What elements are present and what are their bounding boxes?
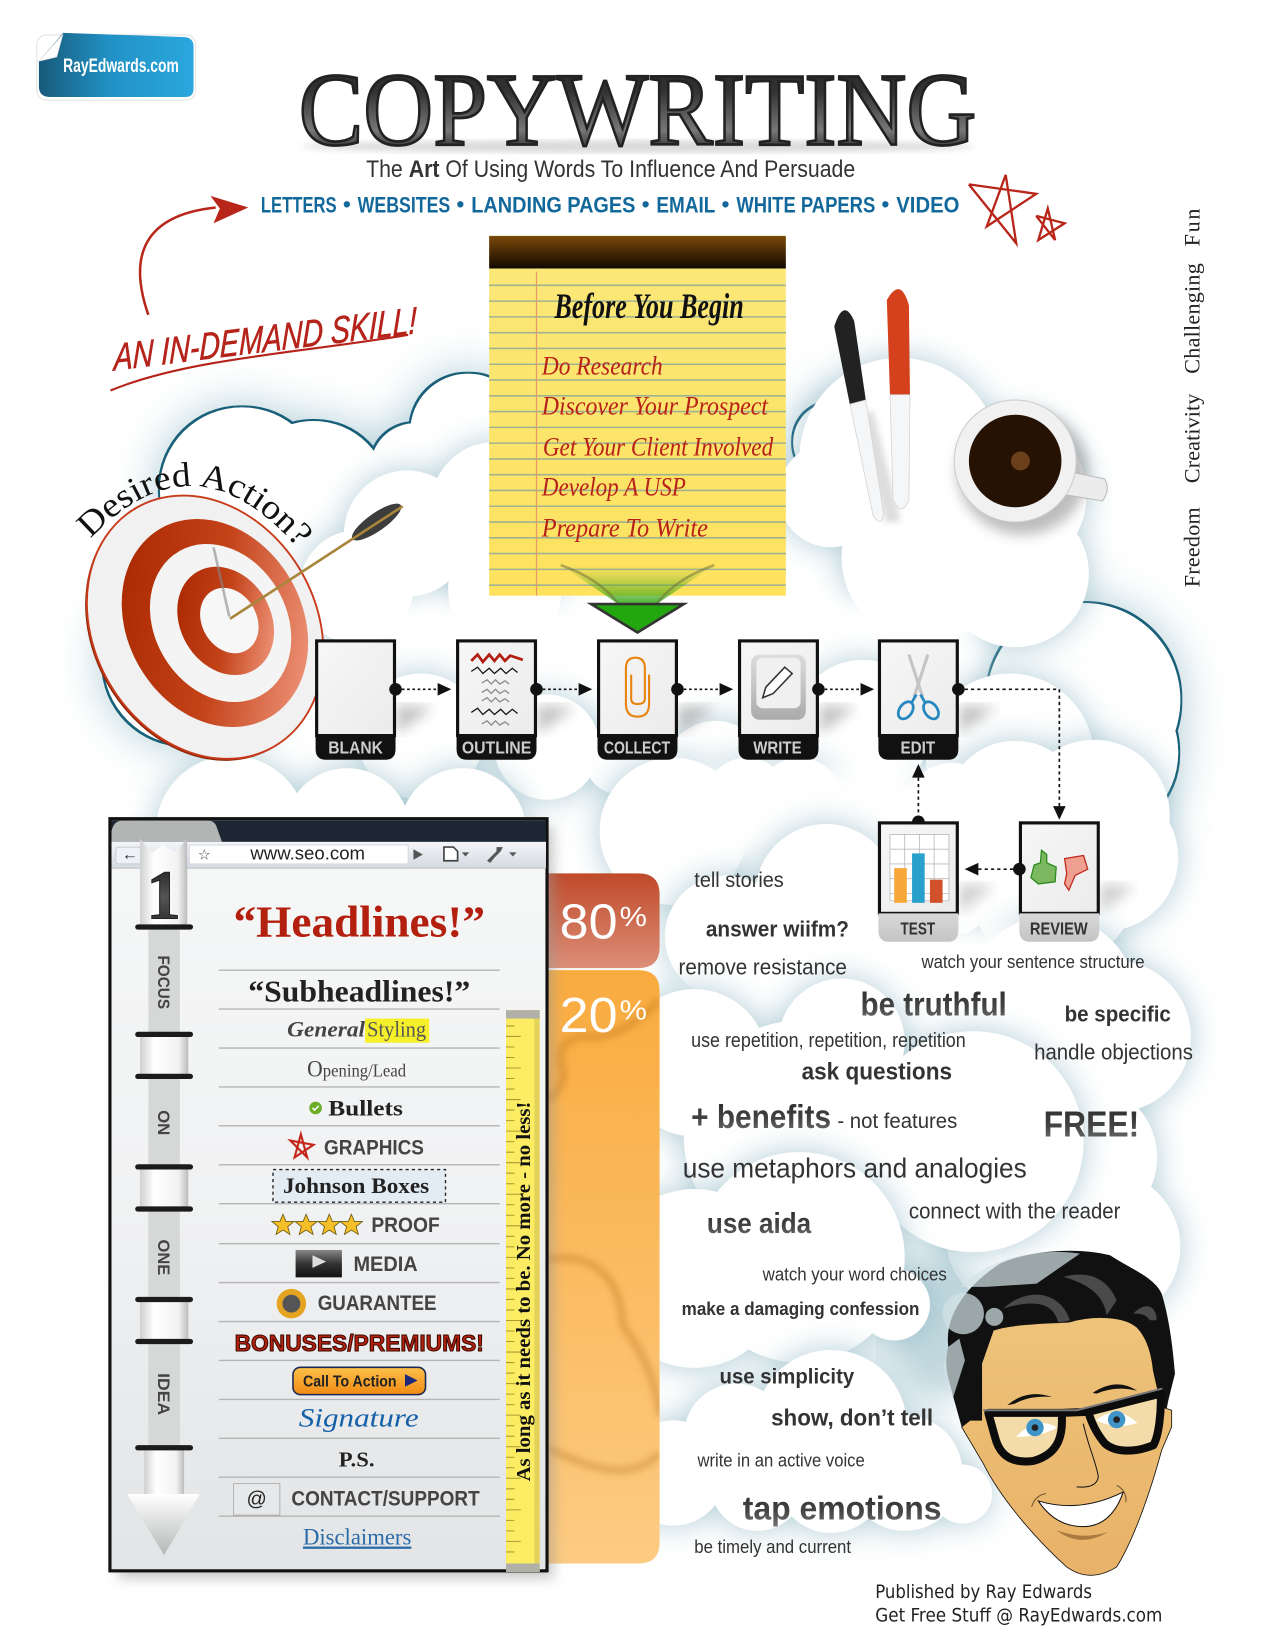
media: MEDIA bbox=[353, 1253, 418, 1276]
word cloud: use metaphors and analogies bbox=[683, 1152, 1027, 1183]
bar: 20 percent bbox=[546, 970, 660, 1563]
handwritten callout: AN IN-DEMAND SKILL! bbox=[112, 300, 417, 380]
publisher note: Get Free Stuff @ RayEdwards.com bbox=[875, 1605, 1162, 1626]
glasses highlight bbox=[983, 1389, 1162, 1410]
browser toolbar: www.seo.com bbox=[249, 843, 365, 864]
word cloud: tap emotions bbox=[743, 1490, 942, 1527]
word cloud: watch your sentence structure bbox=[921, 951, 1145, 972]
connector: edit to review bbox=[952, 683, 1066, 820]
mouth bbox=[1032, 1485, 1126, 1540]
opening lead: Opening/Lead bbox=[307, 1056, 406, 1082]
formats line: LETTERS bbox=[261, 193, 337, 218]
cloud: aida puffs bbox=[605, 1152, 930, 1368]
icon: red curved arrow bbox=[140, 196, 248, 315]
word cloud bbox=[679, 869, 1193, 1557]
step: review: REVIEW bbox=[1030, 918, 1088, 938]
step: test bbox=[878, 823, 994, 942]
proof bbox=[272, 1214, 440, 1237]
focus ribbon: ONE bbox=[154, 1239, 173, 1275]
notepad list: Develop A USP bbox=[541, 473, 686, 502]
word cloud: - not features bbox=[837, 1110, 957, 1133]
vertical words: Freedom bbox=[1179, 507, 1204, 587]
browser toolbar bbox=[112, 842, 546, 868]
eyebrows bbox=[1007, 1384, 1137, 1405]
guarantee bbox=[277, 1289, 437, 1318]
arrow in target bbox=[214, 498, 406, 619]
browser toolbar: ← bbox=[122, 847, 138, 864]
formats line bbox=[261, 192, 959, 218]
step: write bbox=[738, 641, 874, 760]
notepad list: Do Research bbox=[541, 352, 663, 381]
green funnel arrow bbox=[561, 565, 714, 632]
formats line: WHITE PAPERS bbox=[736, 193, 875, 218]
subheadline: “Subheadlines!” bbox=[248, 975, 470, 1009]
general styling bbox=[287, 1016, 429, 1043]
bonuses: BONUSES/PREMIUMS! bbox=[235, 1330, 484, 1356]
focus ribbon: FOCUS bbox=[154, 955, 173, 1009]
contact support bbox=[234, 1484, 480, 1515]
general styling: General bbox=[287, 1016, 366, 1041]
notepad list bbox=[541, 352, 774, 543]
thought cloud over hair bbox=[943, 1252, 1080, 1397]
step: edit: EDIT bbox=[900, 737, 935, 757]
step: review bbox=[1019, 823, 1135, 942]
formats line: LANDING PAGES bbox=[471, 193, 635, 218]
icon: coffee cup bbox=[954, 400, 1107, 535]
ruler bbox=[506, 1010, 540, 1572]
word cloud: be timely and current bbox=[694, 1536, 851, 1557]
step: collect bbox=[598, 641, 733, 760]
contact support: CONTACT/SUPPORT bbox=[291, 1488, 480, 1511]
focus ribbon: ON bbox=[154, 1110, 173, 1135]
cloud: interior fill middle bbox=[684, 926, 1052, 1042]
word cloud: connect with the reader bbox=[909, 1198, 1120, 1223]
cloud: teal outlined back clouds bbox=[103, 374, 1180, 837]
handwritten callout bbox=[110, 300, 417, 391]
cloud: interior fill lower bbox=[652, 768, 968, 863]
formats line: • bbox=[457, 192, 465, 217]
word cloud: write in an active voice bbox=[697, 1450, 865, 1471]
icon: hand drawn stars bbox=[969, 175, 1065, 243]
cloud: right side puffs bbox=[894, 915, 1191, 1323]
johnson boxes: Johnson Boxes bbox=[283, 1173, 430, 1198]
step: edit bbox=[878, 641, 996, 760]
call to action button: Call To Action bbox=[303, 1374, 397, 1391]
eyes bbox=[1016, 1411, 1137, 1437]
cloud: interior fill bbox=[368, 600, 978, 695]
process flow bbox=[316, 641, 1135, 942]
notepad list: Get Your Client Involved bbox=[543, 433, 774, 462]
cloud: top puffs bbox=[300, 358, 1089, 647]
guarantee: GUARANTEE bbox=[318, 1292, 437, 1315]
ruler text: As long as it needs to be. No more - no less! bbox=[513, 1102, 535, 1481]
call to action button bbox=[293, 1367, 426, 1395]
bar: 80 percent bbox=[546, 873, 660, 968]
word cloud: be specific bbox=[1065, 1002, 1171, 1027]
step: collect: COLLECT bbox=[604, 737, 670, 757]
formats line: • bbox=[882, 192, 890, 217]
word cloud: use aida bbox=[707, 1208, 811, 1240]
contact support: @ bbox=[247, 1489, 267, 1511]
word cloud: be truthful bbox=[861, 986, 1007, 1023]
hair highlights bbox=[1003, 1274, 1157, 1323]
cloud: lower puffs bbox=[621, 1350, 992, 1533]
vertical words: Fun bbox=[1179, 209, 1204, 246]
bullets: Bullets bbox=[328, 1095, 403, 1120]
notepad list: Discover Your Prospect bbox=[541, 392, 769, 421]
subtitle: The Art Of Using Words To Influence And Persuade bbox=[366, 156, 855, 183]
notepad list: Prepare To Write bbox=[541, 514, 708, 543]
target bbox=[75, 462, 404, 761]
nose bbox=[1077, 1424, 1098, 1487]
step: blank bbox=[316, 641, 451, 760]
publisher note: Published by Ray Edwards bbox=[875, 1582, 1092, 1603]
word cloud: use simplicity bbox=[720, 1364, 854, 1389]
focus ribbon bbox=[127, 839, 200, 1555]
browser window bbox=[110, 819, 553, 1578]
step: test: TEST bbox=[900, 918, 936, 938]
formats line: • bbox=[722, 192, 730, 217]
vertical words: Creativity bbox=[1179, 394, 1204, 483]
notepad heading: Before You Begin bbox=[554, 286, 744, 326]
target text: Desired Action? bbox=[75, 462, 312, 542]
focus ribbon: IDEA bbox=[154, 1373, 173, 1415]
headline: “Headlines!” bbox=[234, 898, 485, 947]
title shadow bbox=[301, 140, 974, 153]
step: write: WRITE bbox=[753, 737, 802, 757]
disclaimers: Disclaimers bbox=[303, 1525, 411, 1551]
johnson boxes bbox=[273, 1170, 446, 1202]
formats line: • bbox=[642, 192, 650, 217]
browser toolbar: ☆ bbox=[198, 848, 211, 864]
bar: 80 percent: 80 bbox=[560, 895, 618, 950]
bullets bbox=[309, 1095, 403, 1120]
word cloud: ask questions bbox=[802, 1059, 952, 1086]
cloud: metaphors puffs bbox=[621, 979, 1084, 1252]
logo badge bbox=[37, 33, 196, 100]
word cloud: + benefits bbox=[691, 1099, 831, 1136]
word cloud: watch your word choices bbox=[762, 1264, 947, 1285]
cloud background bbox=[103, 358, 1191, 1533]
word cloud: handle objections bbox=[1034, 1040, 1193, 1065]
postscript: P.S. bbox=[339, 1448, 375, 1472]
formats line: • bbox=[343, 192, 351, 217]
formats line: VIDEO bbox=[896, 193, 959, 218]
word cloud: show, don’t tell bbox=[771, 1405, 933, 1431]
media bbox=[296, 1250, 418, 1277]
general styling: Styling bbox=[367, 1016, 426, 1041]
word cloud: answer wiifm? bbox=[706, 917, 849, 942]
row dividers bbox=[219, 970, 500, 1516]
glasses lenses bbox=[988, 1394, 1161, 1461]
step: outline: OUTLINE bbox=[462, 737, 531, 757]
cloud: process row puffs bbox=[358, 660, 1094, 842]
vertical words: Challenging bbox=[1179, 263, 1204, 374]
step: outline bbox=[457, 641, 592, 760]
word cloud: FREE! bbox=[1044, 1104, 1139, 1144]
proof: PROOF bbox=[371, 1214, 440, 1237]
signature: Signature bbox=[299, 1404, 419, 1433]
cloud: lower row puffs bbox=[156, 740, 1178, 968]
vertical words bbox=[1179, 209, 1204, 587]
cloud: tell stories puff bbox=[665, 824, 947, 998]
portrait bbox=[943, 1251, 1175, 1575]
glasses frame bbox=[988, 1394, 1161, 1461]
connector: review to test bbox=[965, 863, 1026, 875]
formats line: EMAIL bbox=[656, 193, 715, 218]
logo text: RayEdwards.com bbox=[63, 55, 179, 77]
big number one: 1 bbox=[146, 858, 181, 935]
graphics: GRAPHICS bbox=[324, 1136, 424, 1159]
word cloud: tell stories bbox=[694, 869, 784, 892]
face bbox=[962, 1318, 1172, 1575]
word cloud: remove resistance bbox=[679, 954, 847, 979]
cloud: glow around thought bubble bbox=[886, 1254, 987, 1401]
graphics bbox=[290, 1134, 424, 1159]
notepad bbox=[489, 236, 786, 596]
step: blank: BLANK bbox=[328, 737, 383, 757]
formats line: WEBSITES bbox=[358, 193, 450, 218]
icon: black marker bbox=[834, 310, 900, 523]
icon: red marker bbox=[887, 289, 910, 509]
bar: 20 percent: % bbox=[620, 995, 647, 1026]
word cloud: make a damaging confession bbox=[682, 1298, 919, 1319]
hair back bbox=[946, 1251, 1175, 1464]
title: COPYWRITING bbox=[299, 51, 976, 167]
publisher note bbox=[875, 1582, 1162, 1626]
bar: 80 percent: % bbox=[620, 901, 647, 932]
word cloud: use repetition, repetition, repetition bbox=[691, 1030, 966, 1052]
connector: test to edit bbox=[912, 764, 925, 828]
bar: 20 percent: 20 bbox=[560, 988, 618, 1043]
